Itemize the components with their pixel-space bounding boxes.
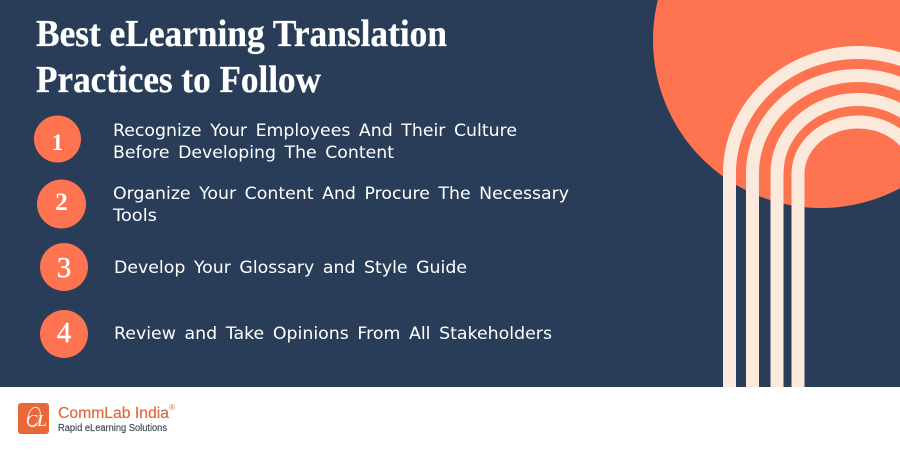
badge 3: 3: [57, 252, 71, 284]
badge 1: [34, 116, 81, 162]
logo mark: [18, 403, 49, 434]
text 3: Develop Your Glossary and Style Guide: [114, 258, 467, 278]
badge 1: 1: [52, 130, 63, 155]
tagline: Rapid eLearning Solutions: [58, 423, 167, 434]
cream arches: [730, 53, 900, 387]
text 2: Organize Your Content And Procure The Necessary: [113, 184, 569, 204]
text 2: Tools: [112, 206, 157, 226]
decorative sun and arches: [653, 0, 900, 387]
brand name: CommLab India: [58, 405, 169, 422]
orange sun: [653, 0, 900, 208]
badge 4: 4: [57, 317, 72, 349]
item 3: [40, 243, 467, 291]
badge 4: [40, 310, 88, 358]
item 1: [34, 116, 517, 163]
logo mark: CL: [26, 411, 47, 430]
text 1: Before Developing The Content: [113, 143, 394, 163]
text 1: [113, 121, 517, 163]
item 2: [37, 180, 569, 228]
footer logo: [18, 403, 175, 434]
text 1: Recognize Your Employees And Their Culture: [113, 121, 517, 141]
title: Practices to Follow: [36, 59, 322, 101]
text 2: [112, 184, 569, 226]
text 4: Review and Take Opinions From All Stakeholders: [114, 324, 552, 344]
item 4: [40, 310, 552, 358]
registered mark: ®: [169, 403, 175, 412]
badge 3: [40, 243, 88, 291]
badge 2: [37, 180, 86, 228]
title: Best eLearning Translation: [36, 13, 447, 55]
title: [36, 13, 447, 101]
badge 2: 2: [55, 189, 68, 216]
